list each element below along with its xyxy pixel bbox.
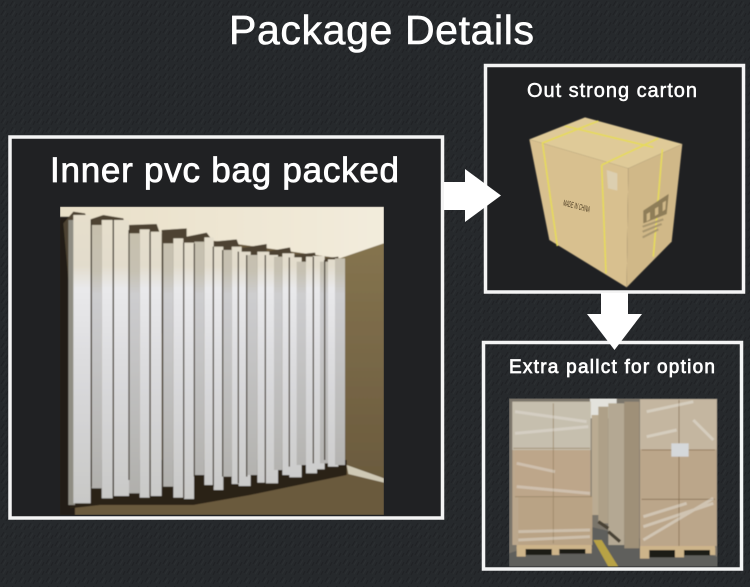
panel: extra pallet [484,342,742,569]
left pallet [512,402,592,557]
back pallets [592,402,639,548]
arrow: down [587,293,642,350]
heading: inner pvc bag packed: Inner pvc bag packed [50,151,399,190]
photo: wrapped pallets [509,398,718,567]
heading: extra pallet for option: Extra pallct for option [509,357,715,378]
heading: out strong carton: Out strong carton [527,80,697,102]
arrow: right [444,169,501,222]
panel: inner pvc bag [10,137,442,518]
photo: foam panels in carton [60,207,384,515]
packing straps [542,121,662,273]
right pallet [640,399,717,559]
title: Package Details [229,7,534,53]
foam panels [68,215,345,505]
icon: cardboard box [529,117,682,287]
MADE IN CHINA mark: MADE IN CHINA [562,198,591,215]
handling symbols label [643,194,669,237]
panel: out strong carton [486,66,744,292]
